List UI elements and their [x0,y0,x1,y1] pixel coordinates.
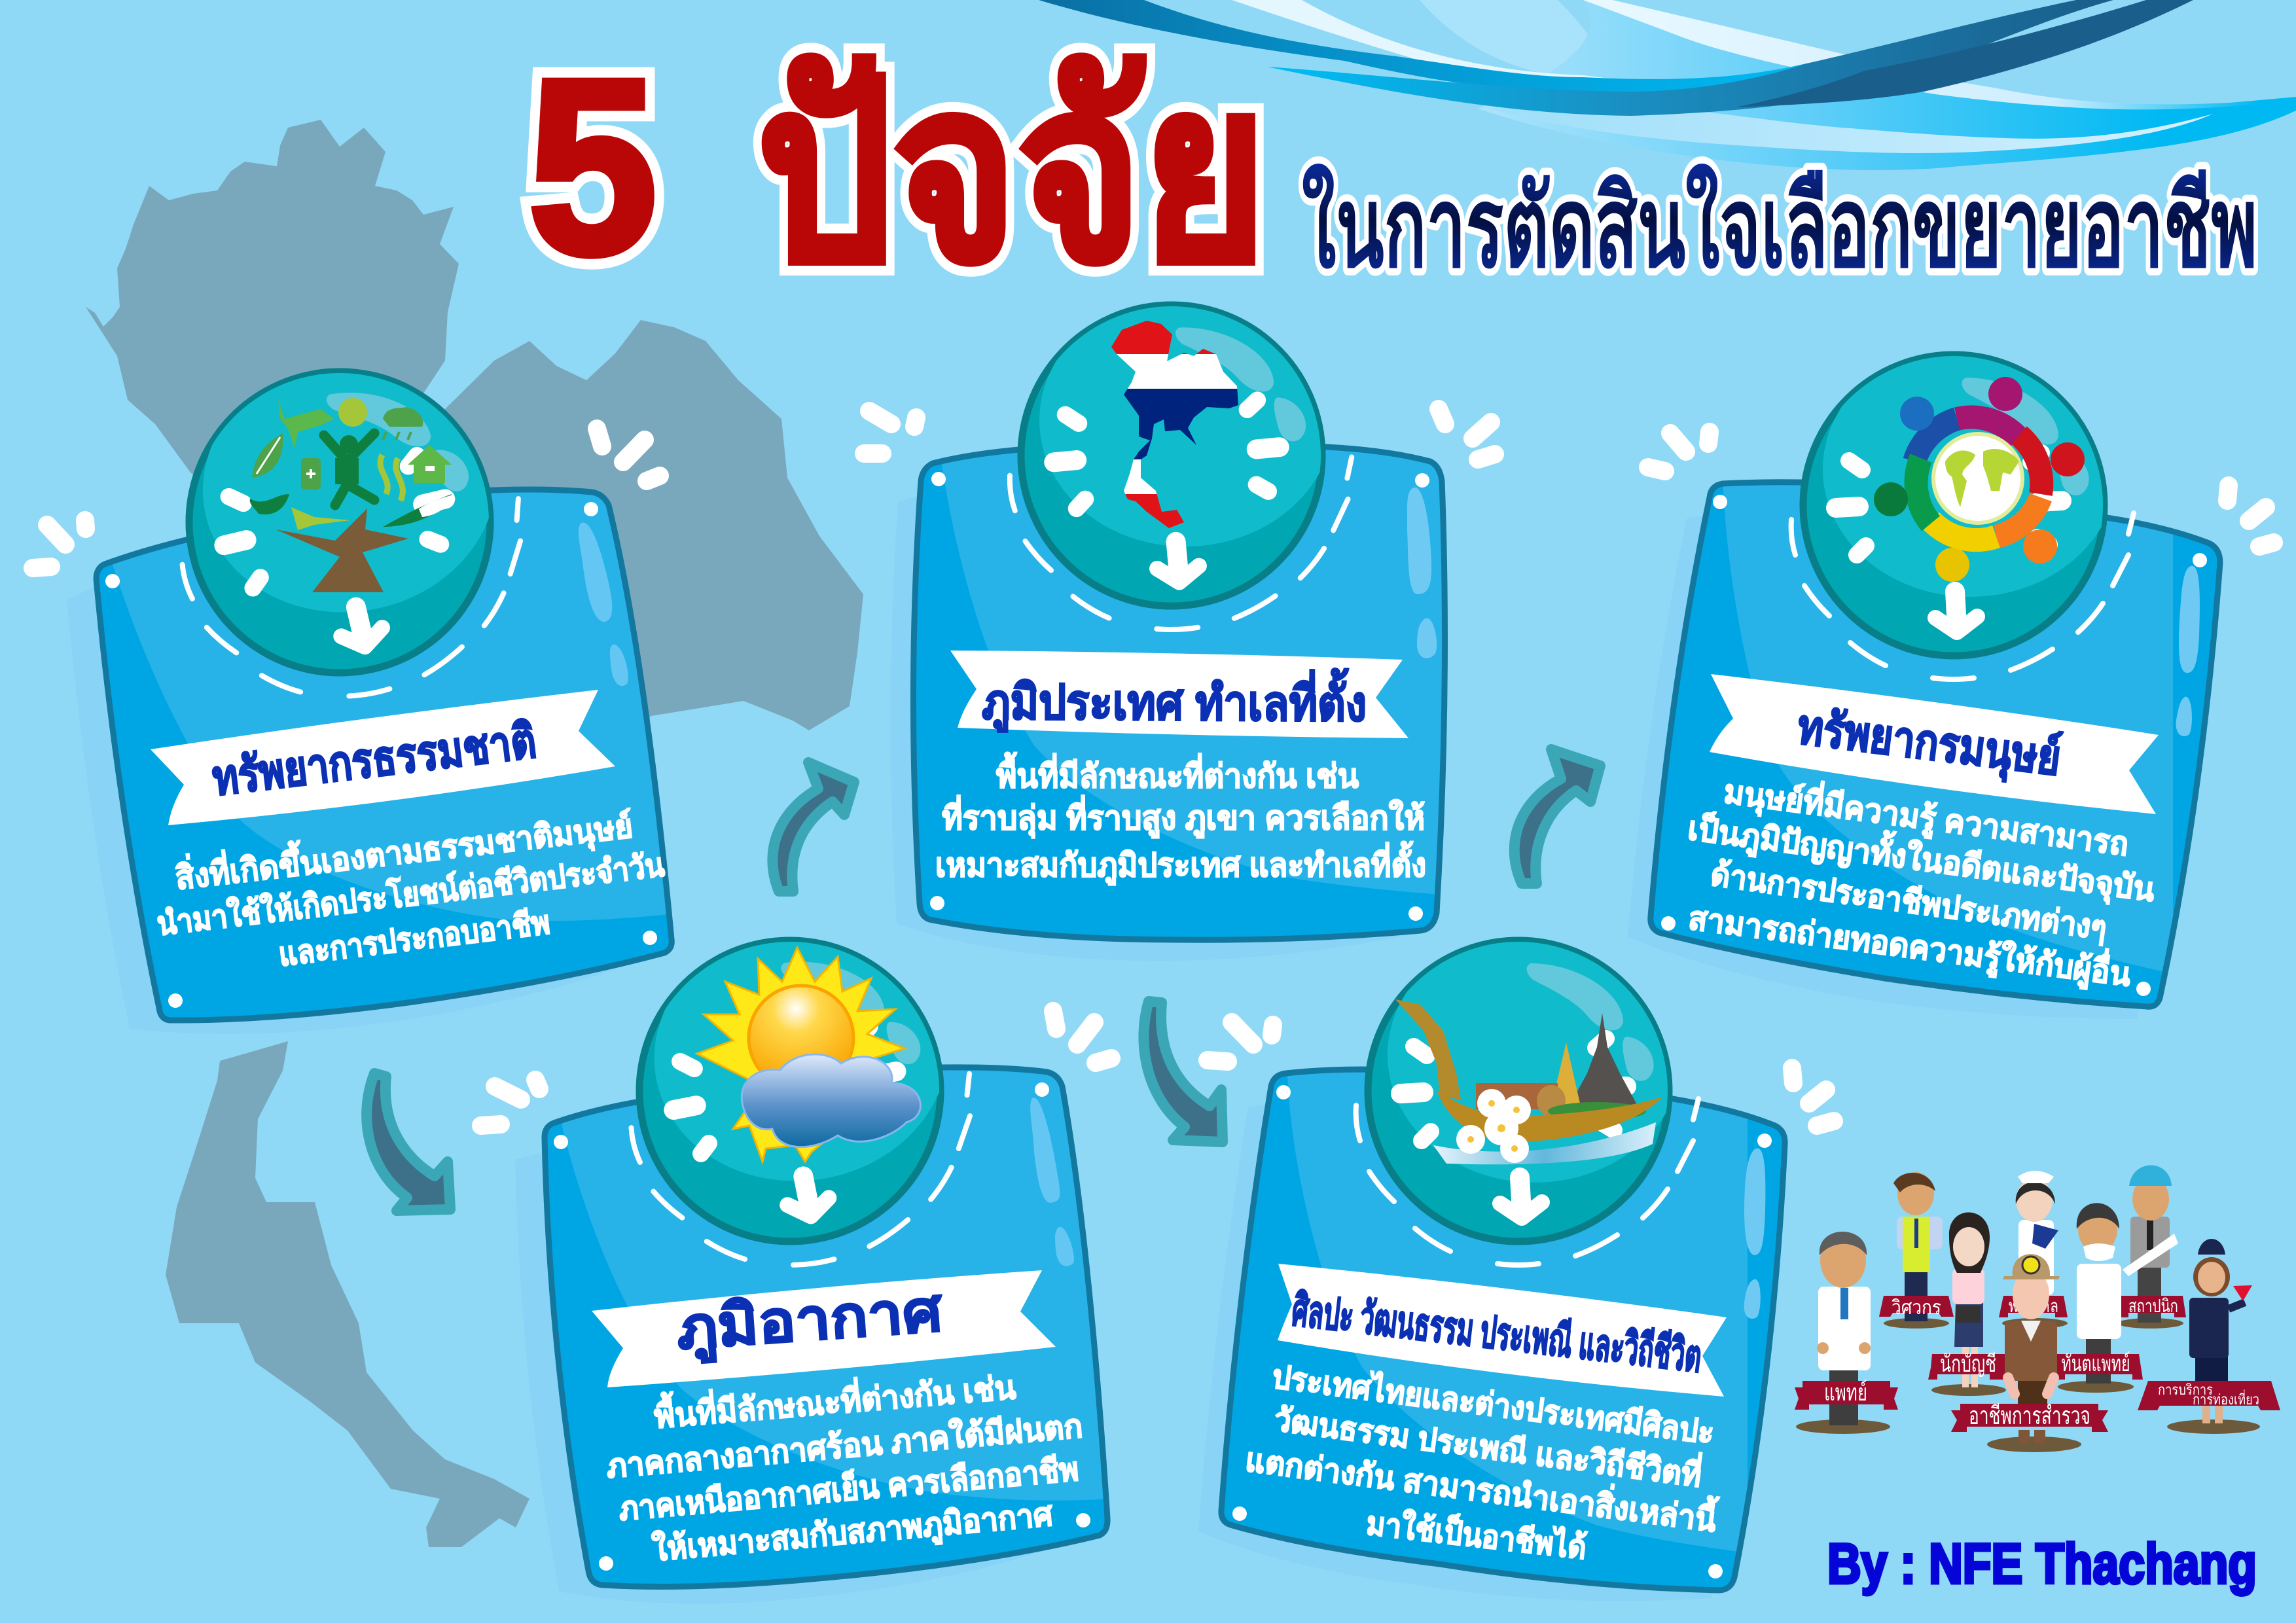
curved arrows [367,749,1600,1211]
text: natural resources description: นำมาใช้ให้เกิดประโยชน์ต่อชีวิตประจำวัน [155,845,666,942]
label: tourism: การบริการ [2158,1382,2213,1398]
figure: dentist: ทันตแพทย์ [2062,1351,2130,1376]
text: culture description: วัฒนธรรม ประเพณี และวิถีชีวิตที่ [1272,1396,1704,1494]
text: climate description: พื้นที่มีลักษณะที่ต่างกัน เช่น [653,1363,1017,1435]
figure: tourism staff [2138,1239,2280,1434]
banner: natural resources [151,690,615,825]
bubble: terrain [1003,286,1357,635]
text: climate description: ภาคเหนืออากาศเย็น ควรเลือกอาชีพ [617,1449,1080,1527]
text: terrain description: เหมาะสมกับภูมิประเทศ และทำเลที่ตั้ง [935,841,1426,885]
panel 3: terrain and location [913,286,1446,940]
figure: explorer [1951,1254,2108,1452]
heading: human resources: ทรัพยากรมนุษย์ [1794,699,2064,789]
panel 4: arts, culture, tradition [1221,927,1785,1590]
banner: terrain [950,651,1408,738]
figure: accountant [1928,1212,2007,1396]
icon: nature symbols [250,398,453,592]
banner: climate [592,1270,1056,1387]
text: human resources description: สามารถถ่ายทอดความรู้ให้กับผู้อื่น [1686,895,2134,995]
text: climate description [605,1363,1084,1570]
text: natural resources description: และการประกอบอาชีพ [277,904,552,973]
heading: culture: ศิลปะ วัฒนธรรม ประเพณี และวิถีชีวิต [1289,1285,1704,1382]
text: natural resources description: สิ่งที่เกิดขึ้นเองตามธรรมชาติมนุษย์ [173,802,635,899]
icon: Thailand flag map [1111,321,1238,528]
icon: royal barge and temples [1395,999,1662,1164]
title: 5 factors: ปัจจัย [757,33,1267,312]
heading: terrain: ภูมิประเทศ ทำเลที่ตั้ง [982,666,1367,734]
figure: doctor: แพทย์ [1824,1379,1867,1406]
text: culture description: ประเทศไทยและต่างประเทศมีศิลปะ [1270,1357,1716,1451]
title: 5 factors: 5 [528,27,657,306]
panel 5: human resources [1651,342,2220,1007]
splash marks [33,409,2274,1126]
text: human resources description [1685,768,2158,995]
text: climate description: ให้เหมาะสมกับสภาพภูมิอากาศ [651,1495,1055,1570]
figure: explorer: อาชีพการสำรวจ [1969,1402,2090,1430]
title: 5 factors [528,27,1267,312]
title: 5 factors: 5 [528,27,657,306]
figure: nurse: พยาบาล [2009,1296,2058,1316]
figure: engineer: วิศวกร [1892,1297,1941,1319]
figure: engineer [1879,1172,1954,1329]
icon: people around globe [1874,377,2085,582]
icon: sun and cloud [697,948,920,1162]
title: 5 factors: ปัจจัย [757,33,1267,312]
wave ribbons top right [1039,0,2296,170]
figure: architect: สถาปนิก [2128,1296,2178,1316]
bubble: climate [606,904,992,1286]
text: culture description [1244,1357,1720,1566]
text: human resources description: เป็นภูมิปัญญาทั้งในอดีตและปัจจุบัน [1685,804,2158,910]
figure: nurse [1999,1171,2068,1329]
text: terrain description: พื้นที่มีลักษณะที่ต่างกัน เช่น [996,752,1359,794]
figure: doctor [1795,1232,1898,1434]
bubble: human resources [1791,342,2134,679]
label: tourism [2158,1382,2259,1408]
panel shadows [67,466,2197,1604]
heading: climate: ภูมิอากาศ [674,1278,945,1365]
text: culture description: แตกต่างกัน สามารถนำเอาสิ่งเหล่านี้ [1244,1435,1720,1539]
panel 2: climate [545,904,1113,1586]
figure: accountant: นักบัญชี [1940,1350,1996,1377]
heading: natural resources: ทรัพยากรธรรมชาติ [209,713,539,806]
banner: human resources [1710,674,2159,814]
label: tourism: การท่องเที่ยว [2193,1389,2259,1408]
professions illustration [1795,1165,2280,1452]
text: terrain description [935,752,1426,885]
bubble: natural resources [151,330,547,722]
text: terrain description: ที่ราบลุ่ม ที่ราบสูง ภูเขา ควรเลือกให้ [942,795,1425,838]
map of Thailand background [86,120,863,1547]
map: north [86,120,459,584]
figure: dentist [2057,1203,2143,1393]
bubble: culture [1356,927,1698,1265]
banner: culture [1278,1264,1727,1397]
text: natural resources description [155,802,666,973]
text: climate description: ภาคกลางอากาศร้อน ภาคใต้มีฝนตก [605,1407,1084,1485]
text: human resources description: มนุษย์ที่มีความรู้ ความสามารถ [1721,768,2131,865]
panel 1: natural resources [96,330,681,1020]
figure: architect [2118,1165,2186,1329]
text: human resources description: ด้านการประอาชีพประเภทต่างๆ [1708,855,2109,947]
text: culture description: มาใช้เป็นอาชีพได้ [1365,1503,1588,1566]
